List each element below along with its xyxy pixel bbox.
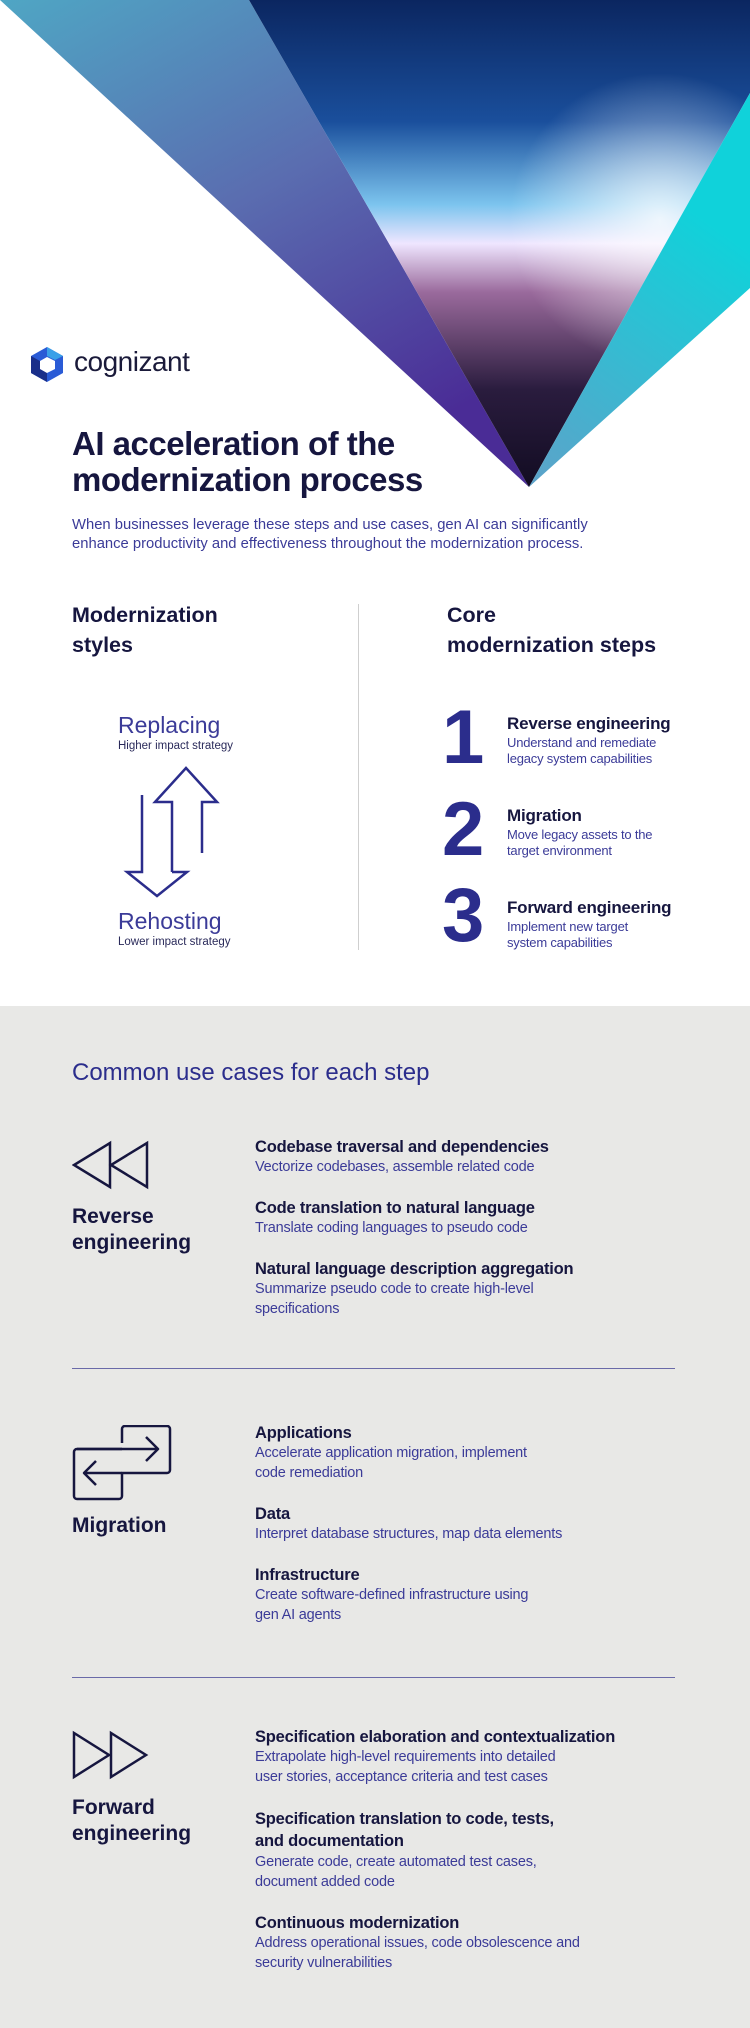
items: migration: Accelerate application migration, implement (255, 1445, 527, 1461)
title (72, 425, 423, 498)
icon: rewind (72, 1140, 148, 1190)
icon: fast forward (72, 1730, 148, 1780)
items: reverse engineering (255, 1138, 573, 1317)
items: migration: Applications (255, 1424, 352, 1442)
items: reverse engineering: Code translation to natural language (255, 1199, 535, 1217)
step 1: 1 (442, 695, 484, 780)
items: migration: gen AI agents (255, 1607, 341, 1623)
step 1: Understand and remediate (507, 735, 656, 750)
step 2: Migration (507, 806, 582, 825)
items: migration: Infrastructure (255, 1566, 359, 1584)
right band (529, 93, 750, 487)
heading: modernization styles: styles (72, 633, 133, 657)
icon: up/down arrows (124, 766, 220, 898)
title: AI acceleration of the (72, 425, 395, 462)
title: modernization process (72, 461, 423, 498)
icon: migration (72, 1425, 172, 1500)
step 3: system capabilities (507, 935, 612, 950)
label: forward engineering (72, 1796, 191, 1845)
subtitle (72, 517, 588, 552)
label: reverse engineering: Reverse (72, 1205, 154, 1228)
subtitle: enhance productivity and effectiveness throughout the modernization process. (72, 536, 583, 552)
step 3: Implement new target (507, 919, 628, 934)
label: reverse engineering: engineering (72, 1231, 191, 1254)
items: reverse engineering: Codebase traversal and dependencies (255, 1138, 549, 1156)
items: forward engineering: Generate code, create automated test cases, (255, 1854, 537, 1870)
logo: cognizant (74, 346, 189, 377)
step 3: 3 (442, 873, 484, 958)
step 1 (442, 695, 670, 780)
left band (0, 0, 529, 487)
heading: core steps (447, 603, 656, 657)
heading: core steps: Core (447, 603, 496, 627)
panel: use cases (0, 1006, 750, 2028)
items: forward engineering (255, 1728, 615, 1971)
items: migration: Data (255, 1505, 290, 1523)
subtitle: When businesses leverage these steps and use cases, gen AI can significantly (72, 517, 588, 533)
items: forward engineering: Specification elaboration and contextualization (255, 1728, 615, 1746)
heading: modernization styles: Modernization (72, 603, 218, 627)
items: migration (255, 1424, 562, 1623)
replacing label: Higher impact strategy (118, 740, 233, 752)
hero graphic (0, 0, 750, 487)
items: forward engineering: and documentation (255, 1832, 404, 1850)
items: forward engineering: Specification translation to code, tests, (255, 1810, 554, 1828)
label: migration: Migration (72, 1514, 166, 1537)
step 2: 2 (442, 787, 484, 872)
items: reverse engineering: specifications (255, 1301, 339, 1317)
items: forward engineering: user stories, acceptance criteria and test cases (255, 1769, 548, 1785)
items: forward engineering: Address operational issues, code obsolescence and (255, 1935, 580, 1951)
photo triangle (249, 0, 750, 487)
label: reverse engineering (72, 1205, 191, 1254)
step 1: legacy system capabilities (507, 751, 652, 766)
items: forward engineering: Continuous modernization (255, 1914, 459, 1932)
items: migration: code remediation (255, 1465, 363, 1481)
items: forward engineering: Extrapolate high-level requirements into detailed (255, 1749, 556, 1765)
items: forward engineering: security vulnerabilities (255, 1955, 392, 1971)
replacing label: Replacing (118, 712, 220, 738)
step 2: Move legacy assets to the (507, 827, 652, 842)
items: reverse engineering: Translate coding languages to pseudo code (255, 1220, 528, 1236)
rehosting label: Lower impact strategy (118, 936, 230, 948)
step 3 (442, 873, 671, 958)
rehosting label: Rehosting (118, 908, 222, 934)
heading: core steps: modernization steps (447, 633, 656, 657)
items: reverse engineering: Vectorize codebases, assemble related code (255, 1159, 534, 1175)
items: migration: Interpret database structures, map data elements (255, 1526, 562, 1542)
items: reverse engineering: Summarize pseudo code to create high-level (255, 1281, 534, 1297)
label: forward engineering: engineering (72, 1822, 191, 1845)
items: reverse engineering: Natural language description aggregation (255, 1260, 573, 1278)
items: migration: Create software-defined infrastructure using (255, 1587, 528, 1603)
label: forward engineering: Forward (72, 1796, 155, 1819)
replacing label (118, 712, 233, 752)
step 2: target environment (507, 843, 612, 858)
step 2 (442, 787, 652, 872)
step 3: Forward engineering (507, 898, 671, 917)
items: forward engineering: document added code (255, 1874, 395, 1890)
logo (31, 346, 190, 382)
heading: modernization styles (72, 603, 218, 657)
heading: common use cases: Common use cases for each step (72, 1059, 430, 1086)
rehosting label (118, 908, 230, 948)
step 1: Reverse engineering (507, 714, 670, 733)
